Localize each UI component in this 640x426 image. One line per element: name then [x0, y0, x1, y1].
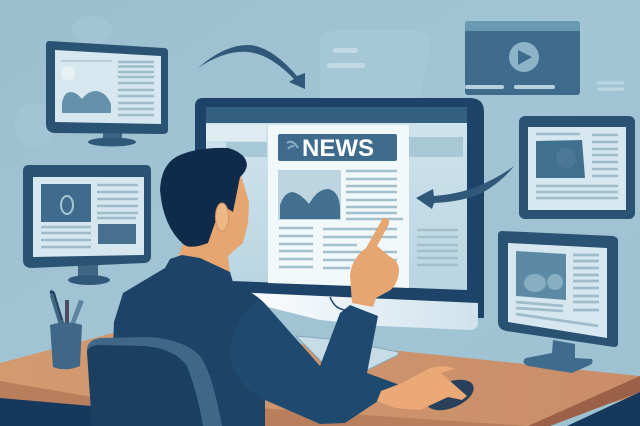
monitor: right bottom — [498, 231, 618, 373]
main monitor — [195, 98, 484, 330]
icon: play button — [509, 42, 539, 72]
monitor: top left — [46, 41, 168, 146]
monitor base — [296, 336, 398, 371]
mouse — [422, 374, 478, 416]
news article page — [268, 125, 409, 288]
mouse hand — [377, 366, 467, 410]
arrow: right curve — [416, 166, 514, 209]
article text lines — [279, 171, 403, 268]
ear — [216, 203, 228, 231]
pointing hand — [350, 218, 399, 307]
headline: NEWS: NEWS — [302, 135, 374, 162]
monitor: left — [23, 165, 151, 285]
monitor frame — [195, 98, 484, 318]
desk — [0, 333, 640, 426]
neck and face — [178, 172, 249, 275]
pen cup — [50, 290, 84, 369]
monitor chin — [233, 290, 478, 330]
arrow: top curve — [198, 45, 305, 89]
cable — [330, 297, 347, 310]
browser window — [206, 123, 467, 290]
chest and back — [113, 255, 300, 426]
monitor: right top — [519, 116, 635, 219]
sleeve — [230, 300, 400, 424]
person — [113, 148, 467, 426]
video player panel — [465, 21, 580, 95]
office chair — [87, 337, 222, 426]
small text lines — [597, 83, 624, 89]
news headline bar — [278, 134, 397, 162]
faded background panel — [320, 31, 430, 98]
icon: search — [287, 142, 298, 149]
faded background blobs — [15, 16, 112, 147]
hair — [160, 148, 247, 247]
article image — [278, 170, 341, 220]
